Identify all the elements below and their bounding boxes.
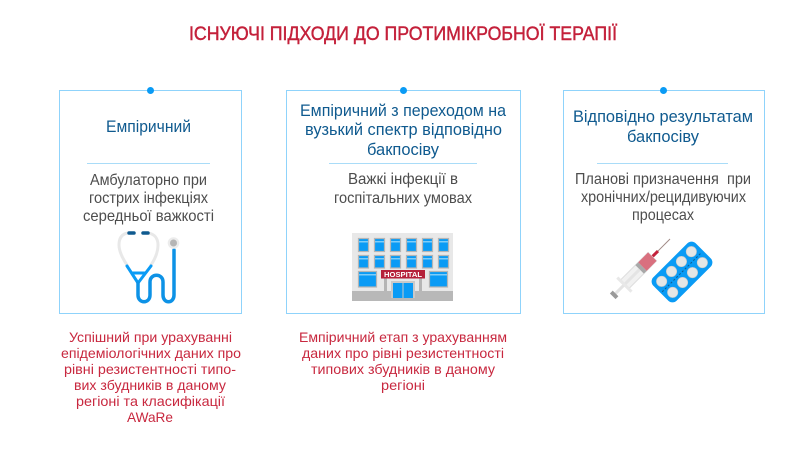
heading: culture-directed xyxy=(573,107,753,146)
heading: culture-directed: бакпосіву xyxy=(627,127,699,146)
text: empirical setting: Амбулаторно при xyxy=(90,172,207,189)
title: ІСНУЮЧІ ПІДХОДИ ДО ПРОТИМІКРОБНОЇ ТЕРАПІЇ xyxy=(189,24,618,45)
callout: empirical note: Успішний при урахуванні xyxy=(69,329,232,345)
callout: empirical note: регіоні та класифікації xyxy=(76,393,225,409)
panel: empirical with de-escalation xyxy=(286,87,520,314)
icon: stethoscope xyxy=(119,233,179,302)
panel: culture-directed xyxy=(564,87,764,314)
heading: de-escalation xyxy=(300,101,507,159)
icon: pill blister xyxy=(649,239,715,305)
callout: de-escalation note: регіоні xyxy=(381,377,425,393)
text: de-escalation setting: Важкі інфекції в xyxy=(348,171,458,188)
heading: de-escalation: Емпіричний з переходом на xyxy=(300,101,507,120)
callout: empirical note: AWaRe xyxy=(127,409,173,425)
heading: culture-directed: Відповідно результатам xyxy=(573,107,753,126)
callout: empirical note xyxy=(61,329,241,425)
callout: empirical note: рівні резистентності типо- xyxy=(64,361,236,377)
callout: empirical note: вих збудників в даному xyxy=(74,377,226,393)
text: culture-directed setting xyxy=(575,171,751,224)
text: empirical setting xyxy=(83,172,214,225)
icon: hospital: HOSPITAL xyxy=(384,270,422,279)
text: empirical setting: середньої важкості xyxy=(83,208,214,225)
heading: de-escalation: бакпосіву xyxy=(367,140,439,159)
callout: de-escalation note xyxy=(299,329,507,393)
icon: syringe xyxy=(606,232,677,303)
heading: de-escalation: вузький спектр відповідно xyxy=(305,120,502,139)
heading: empirical: Емпіричний xyxy=(106,117,191,136)
callout: de-escalation note: типових збудників в даному xyxy=(311,361,495,377)
text: de-escalation setting: госпітальних умовах xyxy=(334,190,472,207)
icon: hospital xyxy=(352,233,453,301)
text: empirical setting: гострих інфекціях xyxy=(89,190,208,207)
text: culture-directed setting: процесах xyxy=(632,207,694,224)
panel: empirical xyxy=(60,87,242,314)
text: culture-directed setting: Планові призначення при xyxy=(575,171,751,188)
callout: de-escalation note: даних про рівні резистентності xyxy=(302,345,504,361)
text: culture-directed setting: хронічних/рецидивуючих xyxy=(581,189,746,206)
text: de-escalation setting xyxy=(334,171,472,207)
callout: de-escalation note: Емпіричний етап з урахуванням xyxy=(299,329,507,345)
callout: empirical note: епідеміологічних даних про xyxy=(61,345,241,361)
